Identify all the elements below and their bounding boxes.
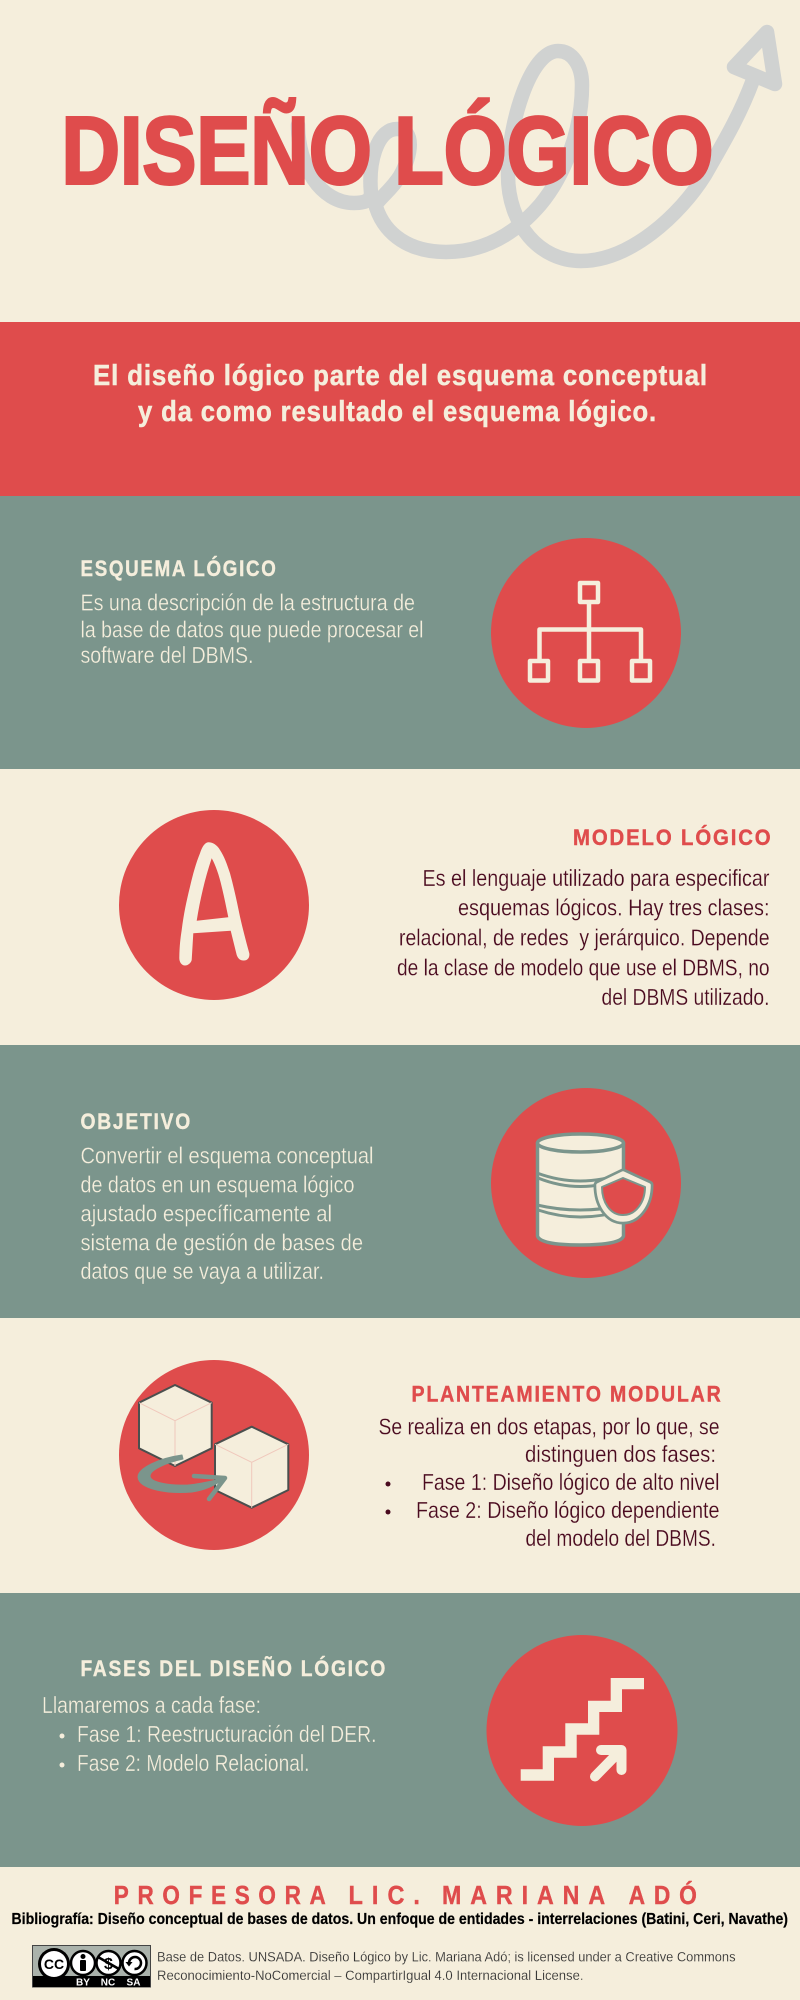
text: license: Reconocimiento-NoComercial – CompartirIgual 4.0 Internacional License.	[157, 1968, 584, 1983]
text: objetivo description: datos que se vaya a utilizar.	[80, 1258, 324, 1284]
icon: cubes	[119, 1360, 309, 1550]
text: author: ADÓ	[629, 1880, 706, 1910]
text: objetivo description: Convertir el esquema conceptual	[80, 1142, 374, 1168]
icon: stairs with arrow	[486, 1635, 678, 1826]
text: badge labels: NC	[101, 1978, 115, 1988]
text: badge labels	[76, 1978, 140, 1988]
text: objetivo description: ajustado específicamente al	[80, 1200, 332, 1226]
text: esquema lógico description: la base de datos que puede procesar el	[80, 616, 424, 642]
text: fases list: Fase 2: Modelo Relacional.	[77, 1750, 310, 1776]
heading: modelo lógico: MODELO LÓGICO	[573, 825, 772, 850]
text: planteamiento description: del modelo del DBMS.	[526, 1525, 716, 1551]
heading: esquema lógico: ESQUEMA LÓGICO	[80, 556, 278, 581]
icon: second cube	[215, 1427, 288, 1508]
text: author: LIC.	[348, 1880, 429, 1910]
text: planteamiento description: Fase 2: Diseño lógico dependiente	[416, 1497, 720, 1523]
text: fases list: Fase 1: Reestructuración del DER.	[77, 1721, 376, 1747]
text: objetivo description	[80, 1142, 374, 1284]
text: planteamiento description: Fase 1: Diseño lógico de alto nivel	[422, 1469, 720, 1495]
text: badge labels: SA	[127, 1978, 140, 1988]
text: intro statement	[93, 360, 708, 428]
text: objetivo description: de datos en un esquema lógico	[80, 1172, 354, 1198]
text: fases list: Llamaremos a cada fase:	[42, 1692, 261, 1718]
text: objetivo description: sistema de gestión de bases de	[80, 1230, 363, 1256]
panel: intro	[0, 322, 800, 496]
text: intro statement: y da como resultado el esquema lógico.	[138, 396, 657, 428]
panel: esquema lógico	[0, 496, 800, 769]
text: esquema lógico description: software del DBMS.	[80, 642, 254, 668]
icon: cc symbol: CC	[44, 1956, 64, 1972]
panel: objetivo	[0, 1045, 800, 1318]
text: esquema lógico description	[80, 590, 424, 668]
icon: shield	[598, 1173, 649, 1220]
text: author: MARIANA	[442, 1880, 614, 1910]
heading: planteamiento modular: PLANTEAMIENTO MODULAR	[412, 1382, 722, 1406]
icon: nc symbol: $	[104, 1956, 113, 1973]
text: badge labels: BY	[76, 1978, 90, 1988]
icon: curved arrow	[138, 1455, 225, 1499]
text: author	[114, 1880, 706, 1910]
icon: creative commons badge	[32, 1946, 150, 1988]
text: planteamiento description: distinguen dos fases:	[525, 1441, 716, 1467]
text: intro statement: El diseño lógico parte del esquema conceptual	[93, 360, 708, 392]
icon: letter A	[119, 810, 309, 1000]
heading: fases del diseño lógico: FASES DEL DISEÑO LÓGICO	[80, 1656, 387, 1681]
icon: first cube	[139, 1385, 212, 1466]
text: planteamiento description	[378, 1414, 720, 1551]
text: modelo lógico description	[397, 865, 770, 1010]
icon: database with shield	[491, 1088, 681, 1278]
icon: hierarchy	[491, 538, 681, 728]
panel: footer	[0, 1867, 800, 2000]
icon: by symbol	[71, 1951, 95, 1975]
text: planteamiento description: Se realiza en dos etapas, por lo que, se	[378, 1414, 720, 1440]
panel: fases del diseño lógico	[0, 1593, 800, 1867]
text: license	[157, 1950, 736, 1983]
icon: swirling arrow	[298, 32, 775, 261]
text: author: PROFESORA	[114, 1880, 334, 1910]
text: license: Base de Datos. UNSADA. Diseño Lógico by Lic. Mariana Adó; is licensed under a Creative Commons	[157, 1950, 736, 1964]
heading: objetivo: OBJETIVO	[80, 1109, 192, 1134]
panel: modelo lógico	[0, 769, 800, 1045]
icon: sa symbol	[122, 1951, 146, 1975]
panel: title	[0, 0, 800, 322]
panel: planteamiento modular	[0, 1318, 800, 1593]
text: esquema lógico description: Es una descripción de la estructura de	[80, 590, 415, 616]
text: fases list	[42, 1692, 376, 1776]
